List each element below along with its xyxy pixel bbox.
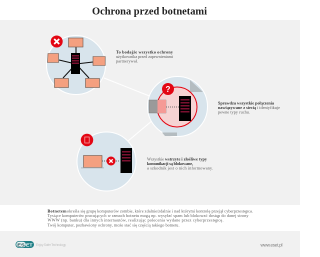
text block: second step [218,100,280,114]
panel: traffic inspection diagram [148,76,208,136]
text block: first step [116,50,174,64]
title: Ochrona przed botnetami [92,6,207,18]
icon: document badge [81,134,93,146]
text block: botnet definition: Tysiące komputerów pracujących w ramach botnetu mogą np. wysyłać spam lub blokować dostęp do danej strony [48,213,249,218]
text block: botnet definition [48,208,253,228]
footer url: www.eset.pl [260,242,282,248]
icon: red question badge: ? [166,85,171,94]
text block: third step: a szkodnik jest o nich informowany. [147,166,213,170]
text block: third step [147,156,213,170]
text block: second step: nawiązywane z siecią [218,105,257,110]
logo: ESET: ET [26,242,33,248]
text block: botnet definition: określa się grupę komputerów zombie, które zdalnie/zdalnie i nad którymi kontrolę przejął cyberprzestępca. [67,208,253,214]
logo: ESET: ES [17,242,26,248]
text block: first step: użytkownika przed zapewnieniami [116,54,174,59]
logo: ESET: Enjoy Safer Technology [36,243,66,247]
text block: second step: Sprawdza wszystkie połączenia [218,100,275,106]
icon: red X badge [51,36,63,48]
logo: ESET [16,241,66,248]
text block: first step: partnerywał. [116,58,138,64]
panel: network diagram with blocked botnet [46,36,106,94]
text block: third step: wstrzyte i złośliwe typy [165,156,208,162]
text block: third step: komunikacji są blokowane, [147,161,193,166]
text block: third step: Wszystkie [147,156,164,162]
text block: second step: pewne typy ruchu. [218,110,250,114]
text block: botnet definition: WWW (np. banku) dla innych internautów, realizując polecenia wydane przez cyberprzestępcę. [48,218,223,224]
text block: first step: To bodajże wszystko ochrony [116,50,174,54]
panel: blocked communication diagram [77,132,136,191]
text block: second step: i identyfikuje [257,105,280,110]
text block: botnet definition: Twój komputer, pozbawiony ochrony, może stać się częścią takiego botnetu. [48,222,180,228]
icon: small X badge [106,156,116,166]
text block: botnet definition: Botnetem [48,208,67,213]
